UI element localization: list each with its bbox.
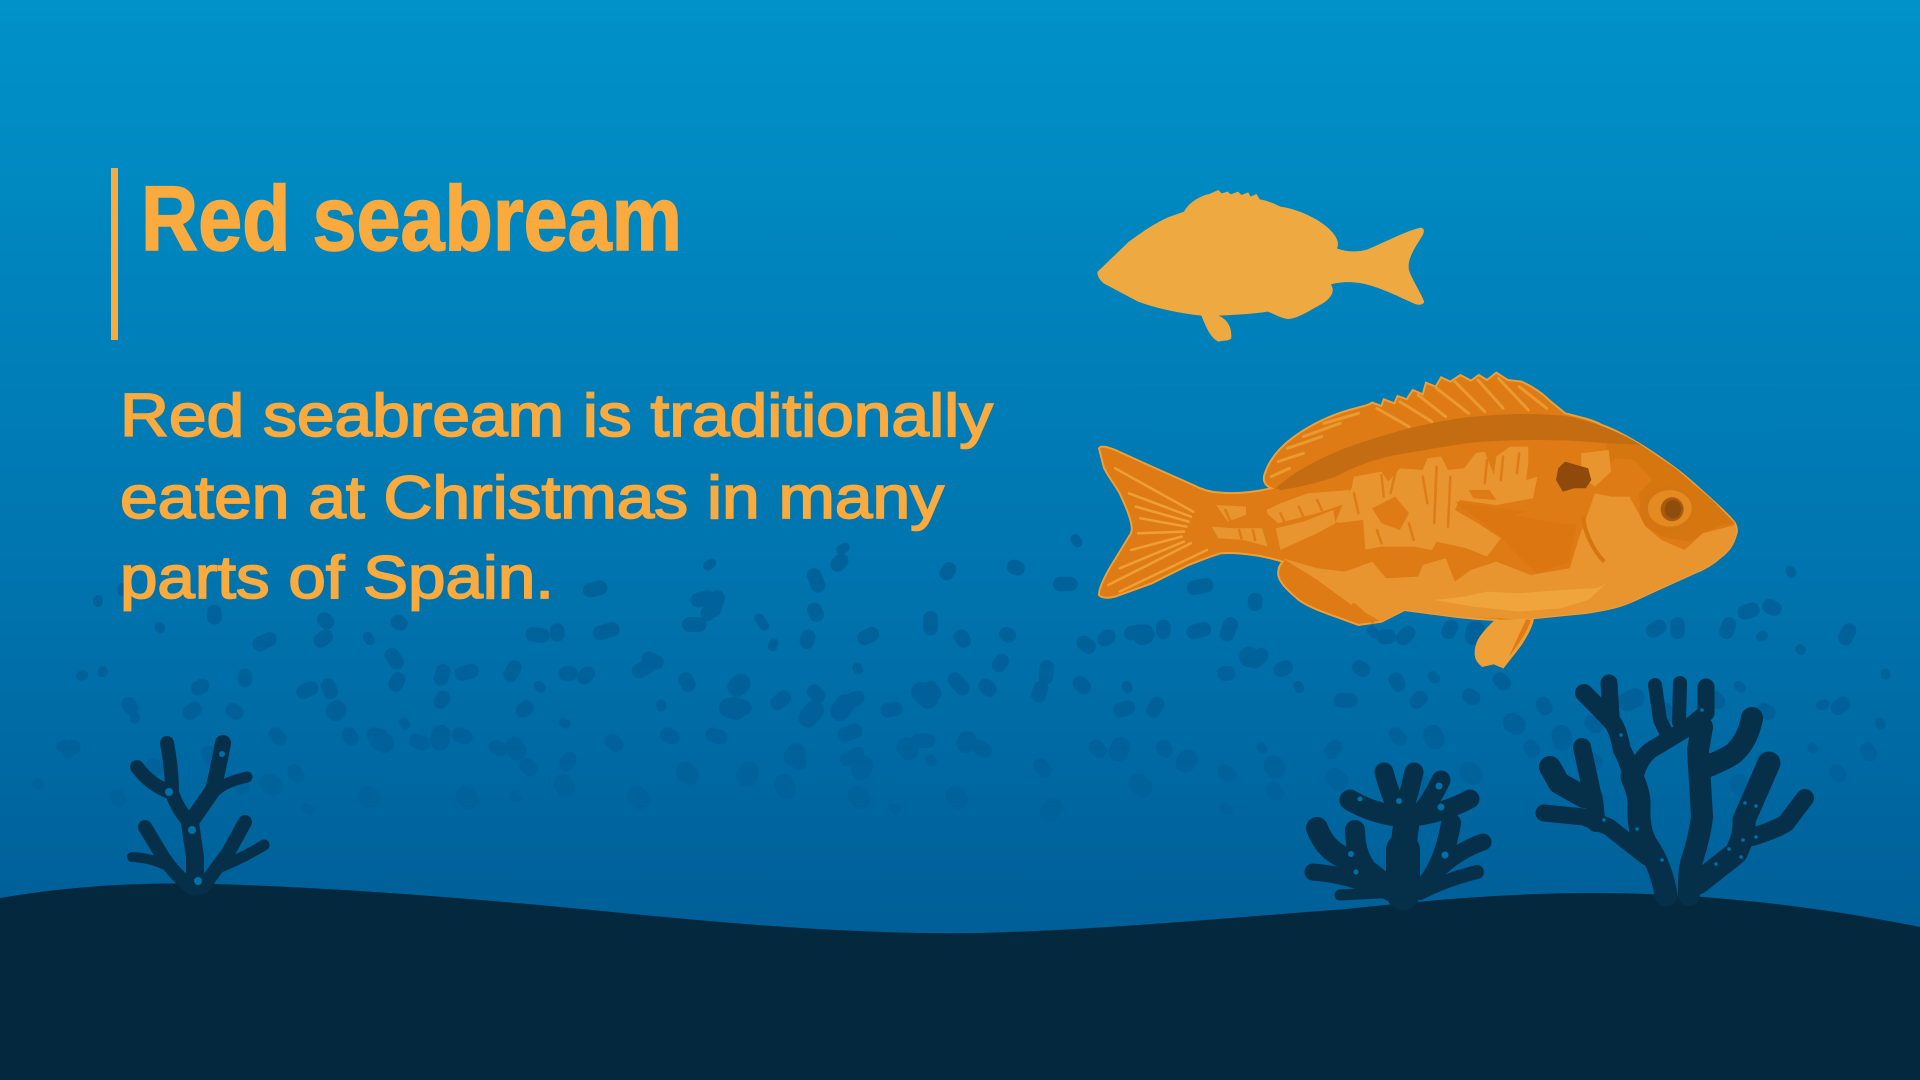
dark mottling inside body — [1299, 478, 1547, 570]
tail fin rays — [1108, 468, 1207, 592]
coral: left — [132, 743, 264, 888]
fish body outline — [1099, 373, 1737, 667]
title: Red seabream — [141, 168, 682, 270]
gill line — [1583, 517, 1604, 562]
belly and cheek light area — [1283, 493, 1736, 622]
dorsal fin rays — [1271, 378, 1547, 477]
body mottled patches — [1336, 447, 1538, 557]
body text: parts of Spain. — [120, 544, 554, 611]
icon: large orange seabream — [1099, 373, 1737, 667]
dark spot — [1556, 462, 1591, 492]
body streaks — [1225, 453, 1519, 543]
pectoral fin — [1455, 502, 1577, 573]
back band — [1276, 414, 1641, 490]
body text: eaten at Christmas in many — [120, 464, 944, 531]
coral: right — [1544, 683, 1805, 895]
accent bar — [111, 168, 118, 340]
background: pebble shoal — [56, 534, 1890, 766]
coral: middle — [1313, 772, 1483, 895]
body text: Red seabream is traditionally — [120, 382, 993, 449]
body text — [120, 382, 993, 611]
head shading — [1606, 443, 1735, 542]
ventral fin — [1476, 618, 1533, 667]
eye — [1640, 486, 1695, 534]
belly highlight — [1434, 583, 1606, 612]
anal fin rays — [1290, 573, 1372, 622]
icon: small fish silhouette — [1097, 190, 1424, 342]
seabed — [0, 883, 1920, 1080]
